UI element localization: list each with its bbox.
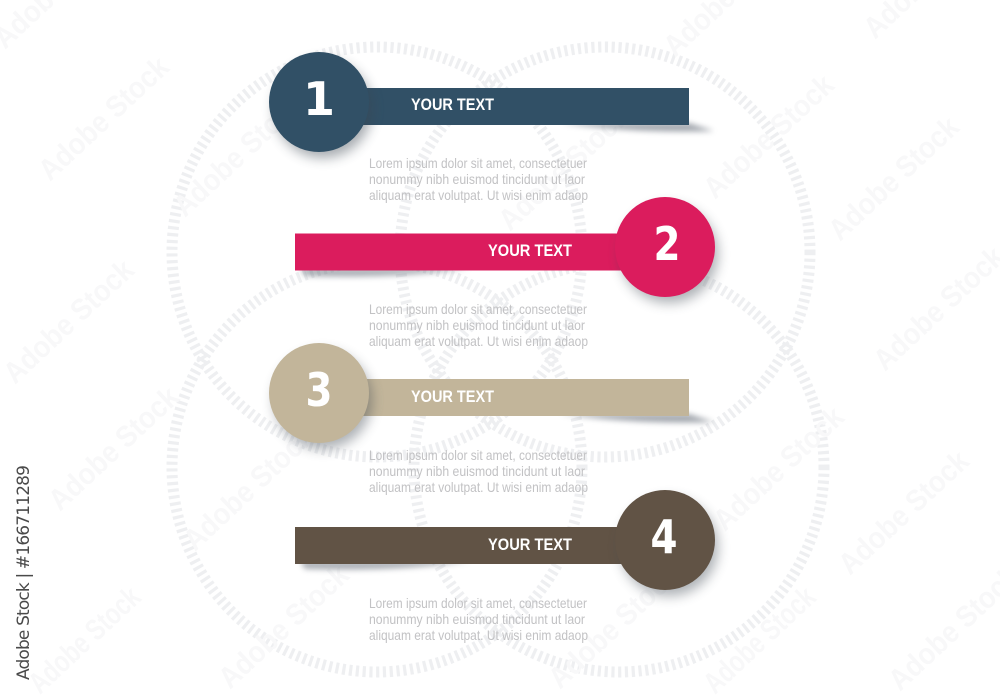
watermark text: Adobe Stock — [697, 68, 841, 205]
circle: step 2 — [615, 197, 715, 297]
text block: step 3: aliquam erat volutpat. Ut wisi enim adaop — [369, 479, 588, 495]
text block: step 4: nonummy nibh euismod tincidunt ut laor — [369, 611, 585, 627]
text block: step 2: aliquam erat volutpat. Ut wisi enim adaop — [369, 333, 588, 349]
watermark text: Adobe Stock — [42, 380, 186, 517]
watermark text: Adobe Stock — [492, 100, 636, 237]
watermark text: Adobe Stock — [542, 558, 686, 695]
watermark text: Adobe Stock — [0, 253, 141, 390]
text block: step 3 — [369, 447, 588, 495]
shadow: bar 1 — [560, 123, 714, 132]
heading: step 4: YOUR TEXT — [488, 535, 573, 554]
watermark text: Adobe Stock — [707, 400, 851, 537]
text block: step 4: Lorem ipsum dolor sit amet, consectetuer — [369, 595, 587, 611]
text block: step 2 — [369, 301, 588, 349]
number 3: 3 — [306, 363, 332, 417]
panel: step 4 — [295, 490, 718, 643]
text block: step 3: nonummy nibh euismod tincidunt ut laor — [369, 463, 585, 479]
number 1: 1 — [303, 72, 335, 126]
text block: step 3: Lorem ipsum dolor sit amet, consectetuer — [369, 447, 587, 463]
text block: step 1 — [369, 155, 588, 203]
text block: step 2: nonummy nibh euismod tincidunt ut laor — [369, 317, 585, 333]
watermark text: Adobe Stock — [32, 50, 176, 187]
text block: step 1: aliquam erat volutpat. Ut wisi enim adaop — [369, 187, 588, 203]
shadow: circle 1 — [274, 60, 372, 158]
text block: step 2: Lorem ipsum dolor sit amet, consectetuer — [369, 301, 587, 317]
watermark text: Adobe Stock — [822, 110, 966, 247]
bar: step 1 — [360, 88, 689, 125]
heading: step 3: YOUR TEXT — [411, 387, 495, 406]
background dashed rings — [172, 47, 824, 672]
panel: step 2 — [295, 197, 718, 349]
text block: step 4: aliquam erat volutpat. Ut wisi enim adaop — [369, 627, 588, 643]
shadow: circle 4 — [620, 498, 718, 596]
shadow: circle 3 — [274, 351, 372, 449]
number 2: 2 — [654, 217, 680, 271]
circle: step 1 — [269, 52, 369, 152]
watermark text: Adobe Stock — [832, 444, 976, 581]
text block: step 1: nonummy nibh euismod tincidunt ut laor — [369, 171, 585, 187]
shadow: bar 2 — [300, 268, 470, 277]
panel: step 3 — [269, 343, 714, 495]
text block: step 4 — [369, 595, 588, 643]
bar: step 2 — [295, 234, 625, 270]
heading: step 1: YOUR TEXT — [411, 95, 495, 114]
heading: step 2: YOUR TEXT — [488, 241, 573, 260]
number 4: 4 — [650, 510, 678, 564]
bar: step 4 — [295, 527, 625, 564]
shadow: circle 2 — [620, 205, 718, 303]
text block: step 1: Lorem ipsum dolor sit amet, consectetuer — [369, 155, 587, 171]
shadow: bar 3 — [560, 414, 714, 423]
shadow: bar 4 — [300, 561, 470, 570]
watermark text: Adobe Stock — [167, 86, 311, 223]
stock credit: Adobe Stock | #166711289 — [14, 465, 34, 680]
circle: step 4 — [615, 490, 715, 590]
panel: step 1 — [269, 52, 714, 203]
bar: step 3 — [360, 379, 689, 416]
watermark text: Adobe Stock — [177, 420, 321, 557]
circle: step 3 — [269, 343, 369, 443]
watermark text: Adobe Stock — [212, 558, 356, 695]
